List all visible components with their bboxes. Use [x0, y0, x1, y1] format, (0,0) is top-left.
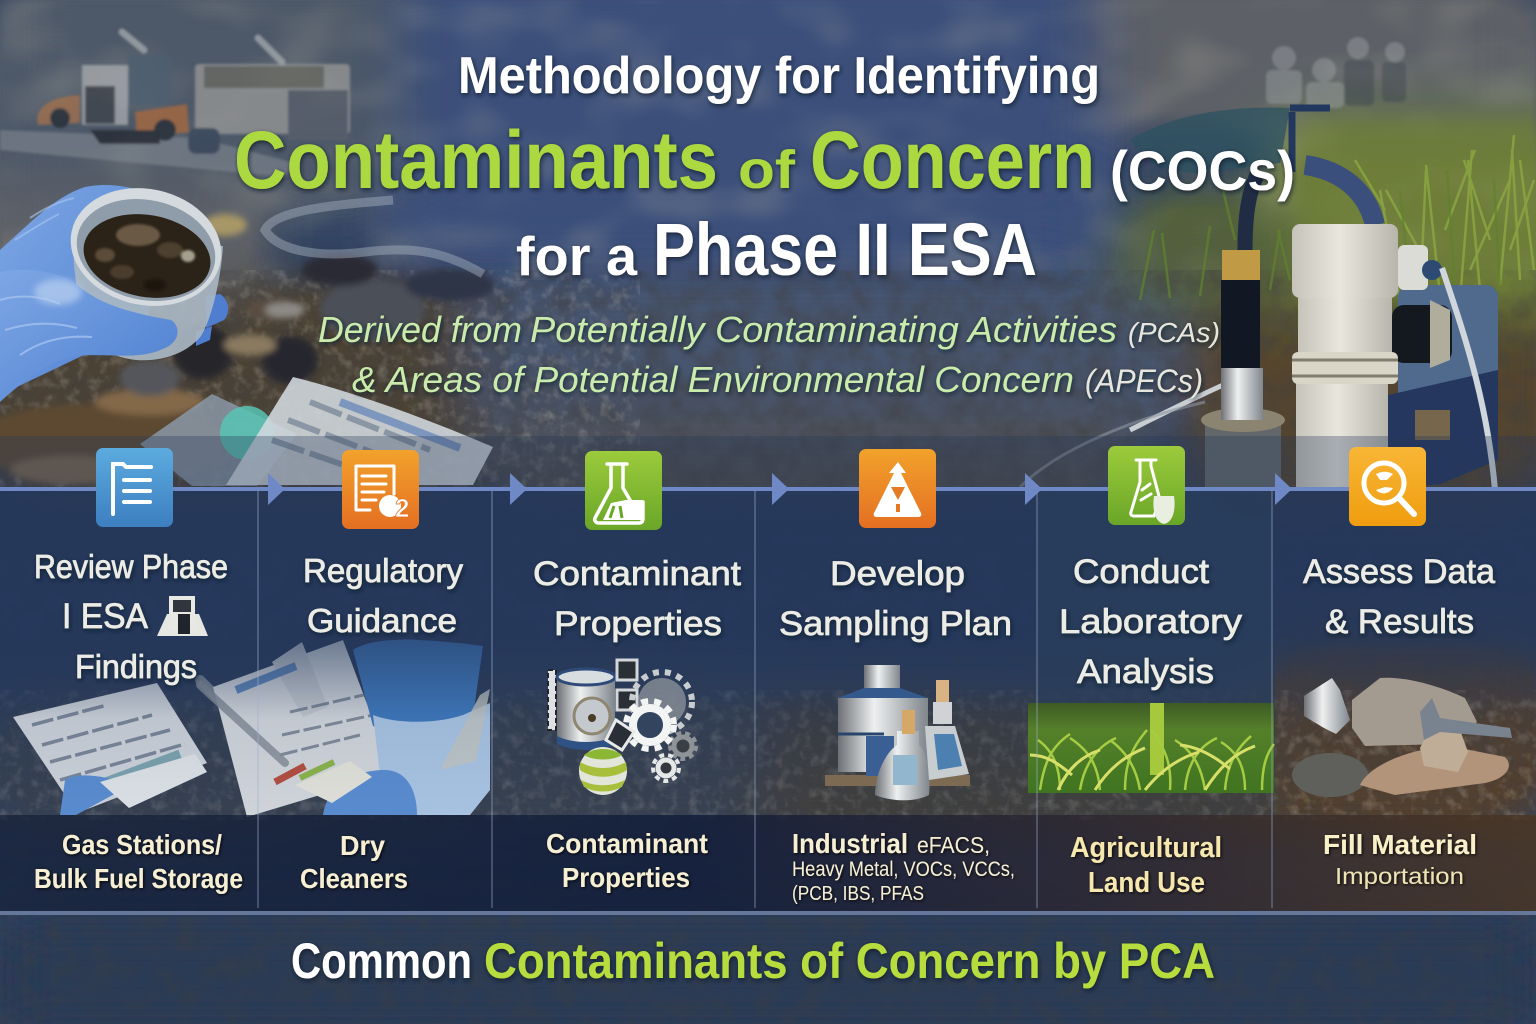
PCA label: contaminant properties: Properties: [562, 862, 690, 893]
step 1 heading: Findings: [75, 648, 197, 685]
step 4 heading: [779, 555, 1012, 643]
icon: printer: [157, 596, 208, 636]
icon: green flask: [585, 451, 662, 530]
step 1 heading: [34, 548, 228, 685]
step 1 heading: Review Phase: [34, 548, 228, 585]
rocks in soil at left: [0, 214, 495, 484]
step 3 heading: [533, 555, 742, 643]
icon: orange regulatory document: 2: [395, 493, 409, 523]
step 6 heading: Assess Data: [1303, 553, 1495, 591]
icon: green lab flask with shield: [1108, 446, 1185, 525]
timeline connector with arrows: [0, 473, 1536, 505]
PCA label: gas stations: Gas Stations/: [62, 829, 222, 860]
icon: orange warning flask: [859, 449, 936, 528]
step 2 heading: Guidance: [307, 602, 457, 639]
PCA label: industrial: Industrial: [792, 828, 908, 859]
step 3 heading: Properties: [554, 605, 722, 643]
PCA label: industrial: eFACS,: [917, 832, 990, 858]
panel 4 image: sampling tanks and bottles: [825, 665, 970, 800]
title: [234, 47, 1295, 291]
footer heading: Common: [291, 933, 472, 989]
subtitle: (PCAs): [1128, 317, 1220, 348]
subtitle: Derived from: [318, 309, 522, 350]
step 5 heading: Conduct: [1073, 553, 1210, 591]
PCA label: industrial: [792, 828, 1015, 905]
gloved hand holding soil sample cup: [0, 174, 232, 402]
groundwater well equipment: [1020, 107, 1498, 490]
step 5 heading: [1059, 553, 1242, 691]
PCA label: industrial: Heavy Metal, VOCs, VCCs,: [792, 858, 1015, 881]
subtitle: Potentially Contaminating Activities: [530, 309, 1117, 350]
PCA label: contaminant properties: Contaminant: [546, 828, 708, 859]
faint workers top right: [1266, 37, 1406, 108]
title: Contaminants: [234, 115, 718, 206]
subtitle: (APECs): [1085, 363, 1203, 399]
documents at mid left: [140, 377, 493, 486]
icon: blue document: [96, 448, 173, 527]
title: for a: [516, 225, 637, 287]
hose across upper middle: [265, 200, 483, 274]
column dividers: [258, 490, 1272, 908]
subtitle: [318, 309, 1220, 400]
PCA label: agricultural: Agricultural: [1070, 832, 1222, 864]
PCA label: agricultural: [1070, 832, 1222, 899]
title: Concern: [810, 115, 1095, 206]
panel 2 image: documents and gloved hands: [200, 640, 490, 817]
step 2 heading: [303, 552, 463, 639]
step 6 heading: & Results: [1325, 603, 1474, 641]
faint trucks top left: [0, 32, 350, 177]
PCA label: gas stations: [34, 829, 243, 894]
panel 6 image: rock and metal tool: [1292, 678, 1512, 797]
panel 3 image: container and gears: [548, 660, 696, 795]
panel 5 image: agricultural grass: [1028, 703, 1274, 793]
PCA label: dry cleaners: [300, 830, 408, 894]
step 5 heading: Laboratory: [1059, 603, 1242, 641]
step 4 heading: Develop: [830, 555, 965, 593]
footer heading: Contaminants of Concern by PCA: [484, 933, 1215, 989]
title: (COCs): [1110, 139, 1295, 202]
title: Methodology for Identifying: [458, 47, 1100, 105]
soft shading over report images: [0, 640, 492, 815]
step 2 heading: Regulatory: [303, 552, 463, 589]
grass top right: [1140, 120, 1536, 300]
PCA label: dry cleaners: Dry: [340, 830, 385, 861]
step 3 heading: Contaminant: [533, 555, 742, 593]
title: Phase II ESA: [653, 208, 1037, 291]
step 6 heading: [1303, 553, 1495, 641]
icon: amber magnifier: [1349, 447, 1426, 526]
step 5 heading: Analysis: [1077, 653, 1214, 691]
PCA label: fill material: Fill Material: [1323, 829, 1477, 860]
PCA label: gas stations: Bulk Fuel Storage: [34, 863, 243, 894]
step 1 heading: I ESA: [62, 597, 149, 636]
step 4 heading: Sampling Plan: [779, 605, 1012, 643]
PCA label: industrial: (PCB, IBS, PFAS: [792, 883, 924, 905]
subtitle: & Areas of Potential Environmental Concern: [352, 359, 1074, 400]
PCA label: agricultural: Land Use: [1088, 867, 1205, 899]
lower steps panel: [0, 436, 1536, 815]
panel 1 image: reports and pen: [13, 680, 285, 815]
contaminant band background: [0, 815, 1536, 915]
icon: orange regulatory document: [342, 450, 419, 529]
title: of: [738, 140, 796, 200]
PCA label: dry cleaners: Cleaners: [300, 863, 408, 894]
PCA label: fill material: [1323, 829, 1477, 889]
PCA label: contaminant properties: [546, 828, 708, 893]
PCA label: fill material: Importation: [1335, 863, 1464, 889]
